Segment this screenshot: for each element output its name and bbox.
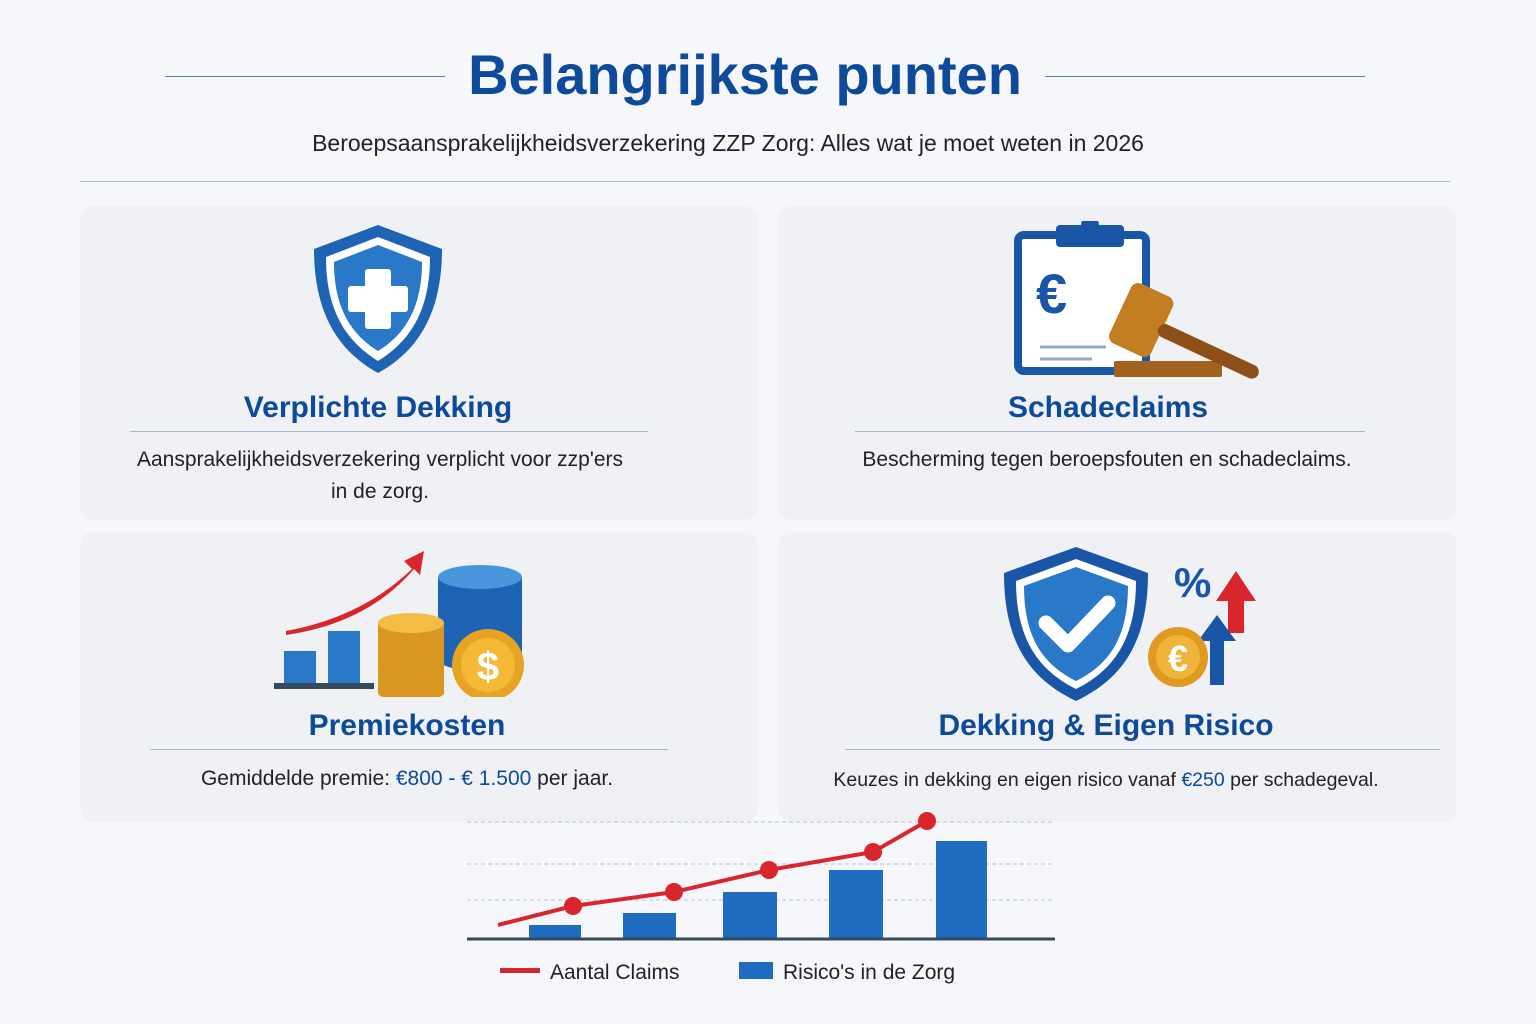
text: in de zorg. <box>331 480 429 503</box>
icon: shield with cross <box>314 225 442 373</box>
icon: shield check with euro and arrows: % <box>1174 559 1211 606</box>
text: Aansprakelijkheidsverzekering verplicht voor zzp'ers <box>137 448 623 471</box>
legend <box>500 961 955 984</box>
heading: Dekking & Eigen Risico <box>938 709 1274 742</box>
icon: clipboard and gavel: € <box>1036 262 1067 325</box>
panel: Premiekosten <box>82 533 756 819</box>
legend: Aantal Claims <box>550 961 680 984</box>
text: Bescherming tegen beroepsfouten en schadeclaims. <box>862 448 1352 471</box>
panel: Dekking & Eigen Risico <box>780 533 1455 819</box>
heading: Premiekosten <box>309 709 505 742</box>
title: Belangrijkste punten <box>468 43 1022 106</box>
icon: shield check with euro and arrows <box>1004 547 1256 701</box>
panel: Verplichte Dekking <box>82 207 756 517</box>
text <box>137 448 623 503</box>
icon: clipboard and gavel <box>1014 221 1259 379</box>
heading: Verplichte Dekking <box>244 391 512 424</box>
icon: bars, coins, arrow <box>274 551 524 697</box>
legend: Risico's in de Zorg <box>783 961 955 984</box>
icon: shield check with euro and arrows: € <box>1168 638 1188 679</box>
subtitle: Beroepsaansprakelijkheidsverzekering ZZP Zorg: Alles wat je moet weten in 2026 <box>312 130 1144 156</box>
text: Keuzes in dekking en eigen risico vanaf €250 per schadegeval. <box>833 769 1379 791</box>
text: Gemiddelde premie: €800 - € 1.500 per jaar. <box>201 767 613 790</box>
panel: Schadeclaims <box>780 207 1455 517</box>
heading: Schadeclaims <box>1008 391 1208 424</box>
icon: bars, coins, arrow: $ <box>477 645 499 689</box>
bar chart <box>467 812 1055 984</box>
